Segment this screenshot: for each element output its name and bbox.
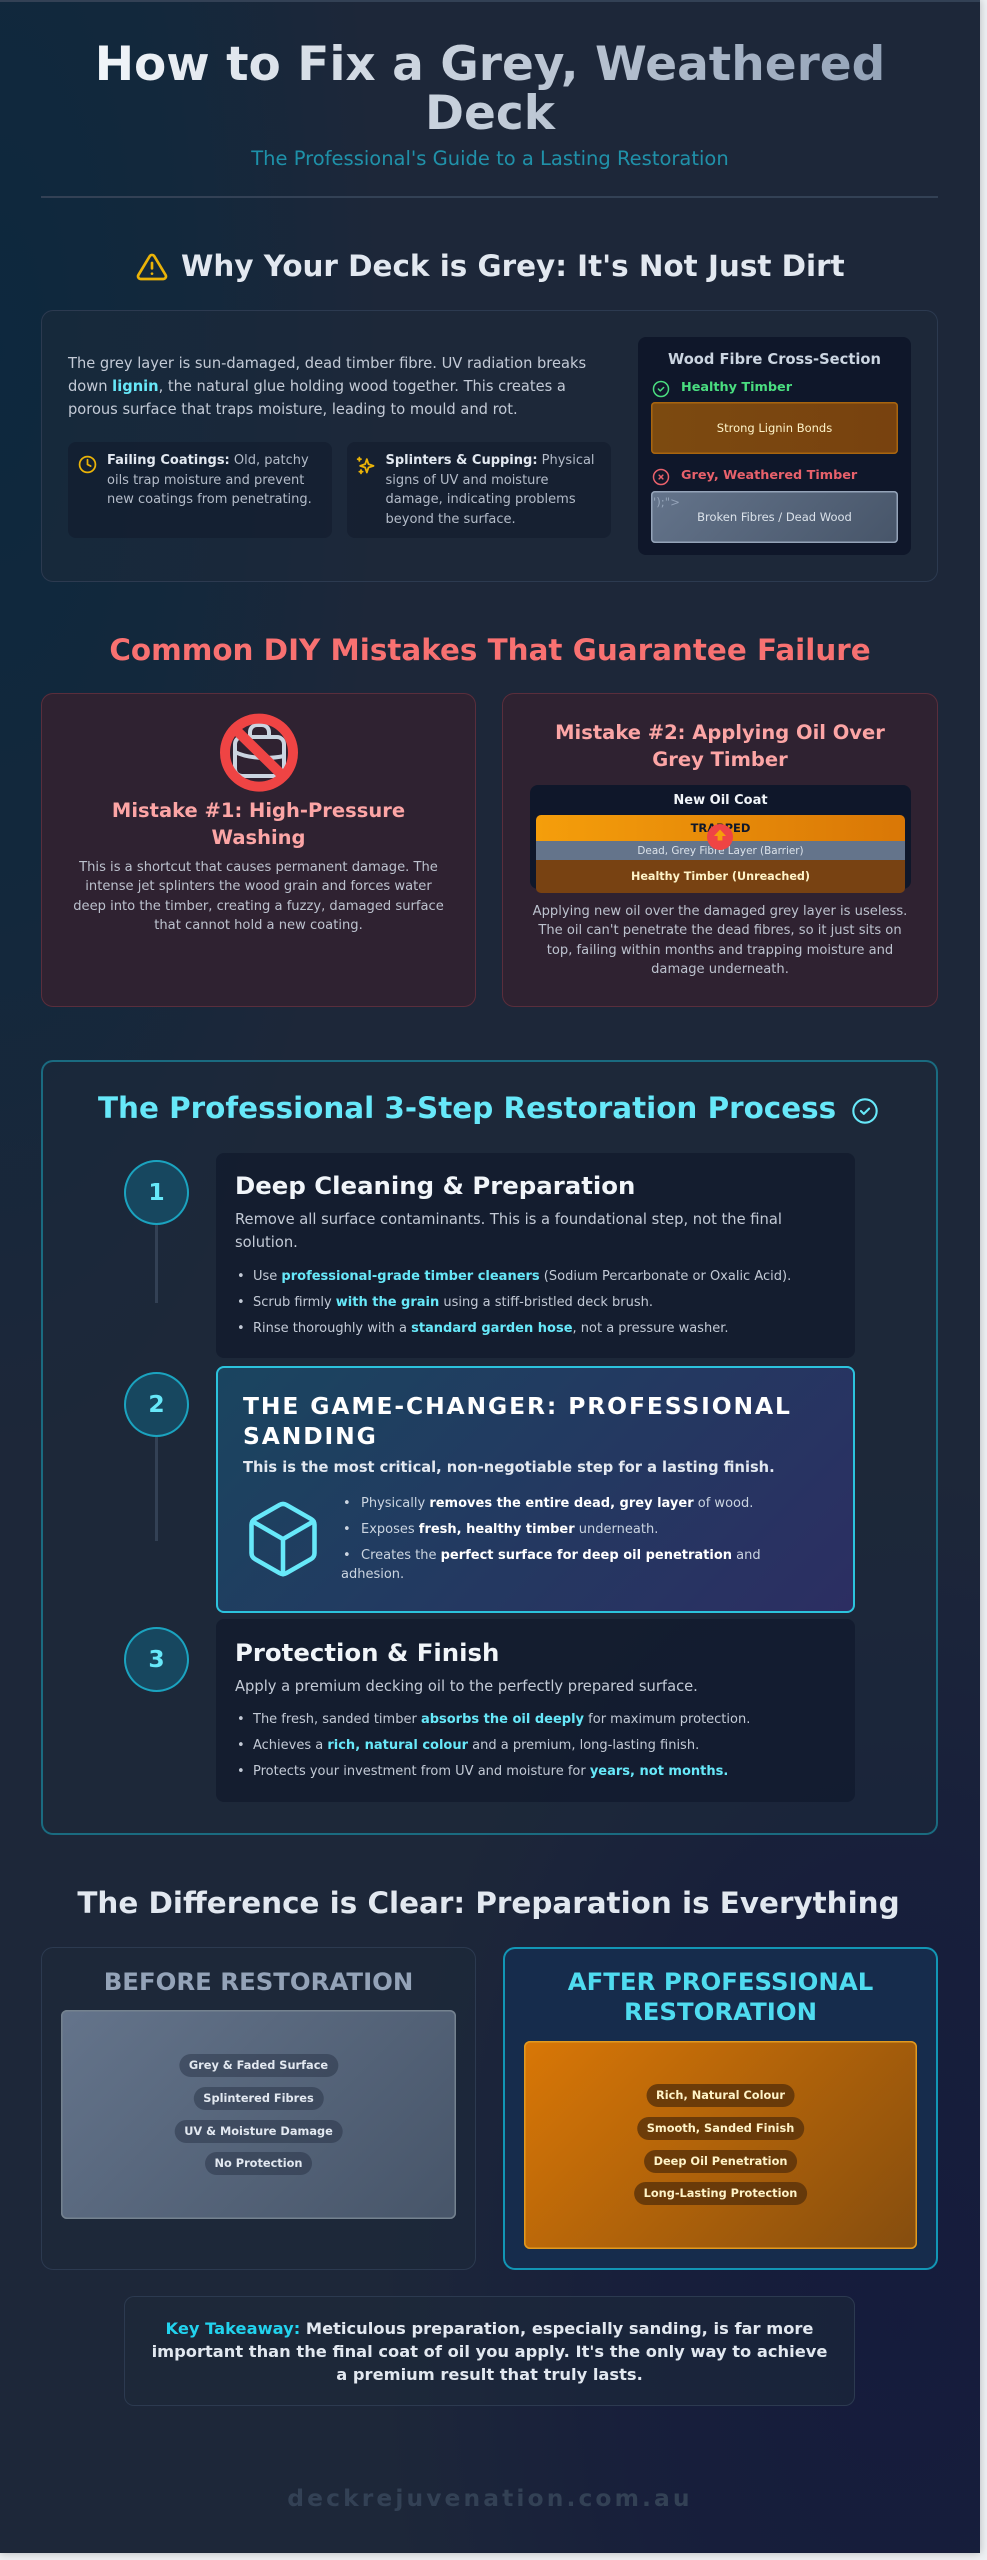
icon: blocked arrow (707, 824, 733, 850)
bar: broken fibres: Broken Fibres / Dead Wood (697, 510, 852, 524)
step 1 title: Deep Cleaning & Preparation (235, 1171, 635, 1200)
text block: explanation: down lignin, the natural glue holding wood together. This creates a (68, 378, 566, 395)
tag (637, 2117, 804, 2140)
layer: healthy timber: Healthy Timber (Unreached) (631, 870, 810, 883)
heading: common diy mistakes: Common DIY Mistakes That Guarantee Failure (109, 633, 871, 667)
diagram: wood fibre cross-section (638, 337, 911, 555)
after heading: RESTORATION (624, 1997, 817, 2026)
heading: mistake 1: Washing (212, 826, 306, 848)
step 2 list: Exposes fresh, healthy timber underneath. (361, 1522, 658, 1536)
step 3 title: Protection & Finish (235, 1638, 499, 1667)
step number 3: 3 (148, 1645, 165, 1673)
heading: why your deck is grey: Why Your Deck is Grey: It's Not Just Dirt (181, 249, 845, 283)
text: mistake 1: This is a shortcut that causes permanent damage. The (79, 860, 438, 875)
icon: x circle (652, 468, 670, 486)
after heading: AFTER PROFESSIONAL (568, 1967, 873, 1996)
step 2 list: • (343, 1522, 351, 1536)
step 3 description: Apply a premium decking oil to the perfectly prepared surface. (235, 1678, 698, 1694)
step 3 list: • (237, 1712, 245, 1726)
takeaway text (152, 2319, 827, 2384)
step 2 card: game changer (216, 1366, 855, 1613)
step 1 card (216, 1153, 855, 1358)
text block: explanation: The grey layer is sun-damaged, dead timber fibre. UV radiation breaks (68, 355, 586, 372)
text: mistake 1: intense jet splinters the wood grain and forces water (85, 879, 432, 894)
step 3 list (237, 1712, 750, 1778)
step 2 description: This is the most critical, non-negotiable step for a lasting finish. (243, 1459, 775, 1476)
step 1 list: • (237, 1268, 245, 1284)
callout: key takeaway (124, 2296, 855, 2406)
step 2 list: Physically removes the entire dead, grey layer of wood. (361, 1496, 753, 1510)
takeaway text: a premium result that truly lasts. (336, 2365, 643, 2384)
tag: Smooth, Sanded Finish (647, 2121, 794, 2135)
text: failing coatings: oils trap moisture and prevent (107, 473, 304, 488)
text: mistake 2 (532, 904, 907, 977)
text: mistake 2: The oil can't penetrate the dead fibres, so it just sits on (538, 923, 902, 938)
step 2 list: adhesion. (341, 1567, 404, 1582)
text: mistake 2: Applying new oil over the damaged grey layer is useless. (533, 904, 907, 919)
layer: healthy timber (536, 860, 905, 893)
text: mistake 1 (73, 860, 444, 933)
after swatch (524, 2041, 917, 2249)
tag (646, 2084, 795, 2107)
tag: Rich, Natural Colour (656, 2088, 785, 2102)
subtitle: The Professional's Guide to a Lasting Restoration (251, 147, 729, 170)
heading: mistake 2: Mistake #2: Applying Oil Over (555, 721, 885, 744)
panel: after restoration (503, 1947, 938, 2270)
icon: no pressure washer (220, 714, 298, 792)
tag (644, 2150, 797, 2173)
heading: mistake 1: Mistake #1: High-Pressure (112, 799, 405, 822)
layer: oil (536, 815, 905, 841)
step number 1 (124, 1160, 189, 1225)
tag: Grey & Faded Surface (189, 2058, 328, 2072)
panel: mistake 1 (41, 693, 476, 1007)
tag: No Protection (215, 2156, 302, 2170)
text: splinters and cupping: signs of UV and moisture (386, 473, 548, 488)
panel: before restoration (41, 1947, 476, 2270)
heading: the difference is clear: The Difference is Clear: Preparation is Everything (77, 1886, 900, 1920)
step 3 list: • (237, 1764, 245, 1778)
layer: grey fibre barrier (536, 841, 905, 860)
step 1 list: Rinse thoroughly with a standard garden hose, not a pressure washer. (253, 1320, 728, 1336)
step number 3 (124, 1627, 189, 1692)
step 3 list: Achieves a rich, natural colour and a premium, long-lasting finish. (253, 1738, 699, 1752)
stray text: ');"> (653, 495, 680, 509)
diagram title: Wood Fibre Cross-Section (668, 351, 881, 368)
text: failing coatings (107, 453, 312, 507)
text: splinters and cupping: beyond the surface. (386, 512, 516, 527)
tag (634, 2182, 807, 2205)
step 2 title: SANDING (243, 1422, 378, 1450)
step 2 title (243, 1392, 792, 1450)
panel: why your deck is grey (41, 310, 938, 582)
step 2 title: THE GAME-CHANGER: PROFESSIONAL (243, 1392, 792, 1420)
step 1 list (237, 1268, 791, 1336)
footer: website: deckrejuvenation.com.au (287, 2484, 693, 2512)
step number 2: 2 (148, 1390, 165, 1418)
icon: clock (78, 456, 96, 474)
heading: mistake 2 (555, 721, 885, 770)
tag: Splintered Fibres (203, 2091, 314, 2105)
layer: grey fibre barrier: Dead, Grey Fibre Layer (Barrier) (637, 844, 804, 856)
icon: check circle (652, 380, 670, 398)
tag (205, 2152, 312, 2175)
text: mistake 2: top, failing within months and trapping moisture and (547, 943, 893, 958)
takeaway text: Key Takeaway: Meticulous preparation, especially sanding, is far more (166, 2319, 813, 2338)
bar: strong lignin bonds: Strong Lignin Bonds (717, 421, 832, 435)
text: failing coatings: Failing Coatings: Old, patchy (107, 453, 309, 468)
icon: sanding block (249, 1502, 317, 1576)
step 3 list: • (237, 1738, 245, 1752)
step 1 list: • (237, 1294, 245, 1310)
diagram: oil over grey layer (530, 785, 911, 889)
heading: process: The Professional 3-Step Restoration Process (98, 1091, 836, 1125)
text: splinters and cupping (386, 453, 595, 527)
step 3 list: The fresh, sanded timber absorbs the oil deeply for maximum protection. (253, 1712, 750, 1726)
panel: mistake 2 (502, 693, 938, 1007)
label: healthy timber: Healthy Timber (681, 380, 792, 395)
bar: broken fibres (651, 491, 898, 543)
text: failing coatings: new coatings from penetrating. (107, 492, 312, 507)
text: mistake 1: deep into the timber, creating a fuzzy, damaged surface (73, 899, 444, 914)
tag: UV & Moisture Damage (184, 2124, 333, 2138)
layer: oil: TRAPPED (691, 821, 750, 835)
step 2 list (341, 1496, 761, 1582)
step 3 list: Protects your investment from UV and moisture for years, not months. (253, 1764, 728, 1778)
text: splinters and cupping: damage, indicating problems (386, 492, 576, 507)
step 1 list: Scrub firmly with the grain using a stiff-bristled deck brush. (253, 1294, 653, 1310)
card: failing coatings (68, 442, 332, 538)
tag: Deep Oil Penetration (654, 2154, 787, 2168)
panel: restoration process (41, 1060, 938, 1835)
step 1 list: • (237, 1320, 245, 1336)
step number 2 (124, 1372, 189, 1437)
step number 1: 1 (148, 1178, 165, 1206)
text: mistake 1: that cannot hold a new coating. (154, 918, 363, 933)
label: grey weathered timber: Grey, Weathered Timber (681, 468, 857, 483)
tag (174, 2120, 343, 2143)
icon: check circle (852, 1098, 878, 1124)
step 1 list: Use professional-grade timber cleaners (Sodium Percarbonate or Oxalic Acid). (253, 1268, 791, 1284)
before heading: BEFORE RESTORATION (104, 1967, 413, 1996)
title: How to Fix a Grey, Weathered (95, 37, 885, 92)
step 3 card (216, 1619, 855, 1802)
step 1 description (235, 1210, 782, 1250)
step 2 list: • (343, 1496, 351, 1510)
icon: sparkles (356, 456, 374, 474)
step 1 description: solution. (235, 1234, 298, 1250)
step 1 description: Remove all surface contaminants. This is a foundational step, not the final (235, 1210, 782, 1228)
bar: strong lignin bonds (651, 402, 898, 454)
tag: Long-Lasting Protection (644, 2186, 797, 2200)
text: mistake 2: damage underneath. (651, 962, 789, 977)
step 2 list: • (343, 1548, 351, 1562)
heading: mistake 2: Grey Timber (652, 748, 788, 770)
text block: explanation: porous surface that traps moisture, leading to mould and rot. (68, 401, 518, 418)
label: new oil coat: New Oil Coat (673, 793, 768, 808)
text: splinters and cupping: Splinters & Cupping: Physical (386, 453, 595, 468)
text block: explanation (68, 355, 586, 418)
title: Deck (425, 86, 555, 141)
step 2 list: Creates the perfect surface for deep oil penetration and (361, 1548, 761, 1562)
title (0, 40, 980, 138)
card: splinters and cupping (347, 442, 611, 538)
icon: warning triangle (136, 254, 168, 280)
heading: mistake 1 (112, 799, 405, 848)
after heading (568, 1967, 873, 2026)
tag (179, 2054, 338, 2077)
before swatch (61, 2010, 456, 2219)
takeaway text: important than the final coat of oil you apply. It's the only way to achieve (152, 2342, 827, 2361)
tag (193, 2087, 324, 2110)
